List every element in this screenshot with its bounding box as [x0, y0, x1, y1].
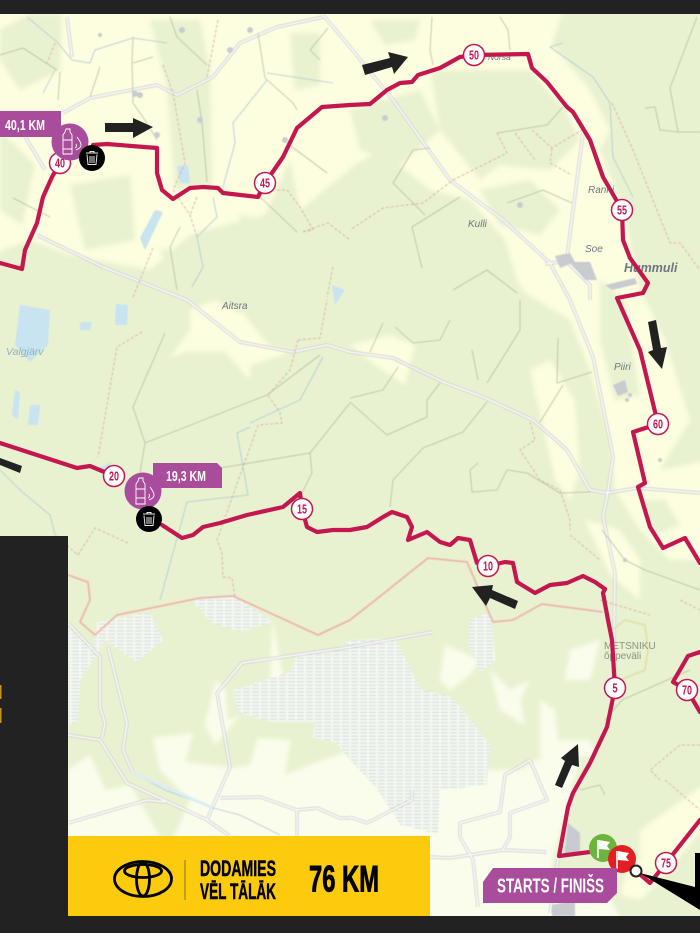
- km marker 60: [648, 414, 668, 434]
- sponsor banner: [68, 836, 430, 916]
- slogan: VĒL TĀLĀK: [200, 879, 276, 904]
- protected area boundary: [68, 558, 603, 635]
- km marker 5: [604, 678, 626, 698]
- slogan: DODAMIES: [200, 856, 276, 881]
- whitish clearings in the south: [68, 620, 600, 926]
- km marker 40: [50, 152, 70, 174]
- training ground boundary: [612, 620, 648, 680]
- km marker 20: [104, 466, 124, 486]
- forest blotches inside farmland: [0, 14, 680, 535]
- place: Aitsra: Aitsra: [221, 301, 248, 312]
- direction arrow: [105, 118, 153, 138]
- aid station 40,1 km: [0, 111, 105, 171]
- km marker 10: [478, 556, 498, 576]
- label: starts / finiss: STARTS / FINIŠS: [497, 874, 604, 898]
- divider: [184, 860, 186, 900]
- km marker 70: [676, 680, 698, 700]
- place: Ranni: Ranni: [588, 185, 615, 196]
- km marker 55: 55: [617, 202, 627, 218]
- direction arrow: [555, 744, 579, 788]
- km marker 75: 75: [661, 856, 671, 870]
- km marker 20: 20: [109, 468, 119, 484]
- place: Nõrsa: Norsa: [488, 52, 511, 62]
- km marker 50: [464, 44, 484, 66]
- water bodies: [12, 165, 345, 478]
- place: õppeväli: õppeväli: [604, 651, 641, 662]
- km marker 5: 5: [612, 680, 618, 696]
- label: starts / finiss: [483, 868, 617, 903]
- distance: 76 km: 76 KM: [309, 858, 379, 900]
- km marker 15: [292, 498, 312, 520]
- km marker 70: 70: [682, 682, 692, 698]
- left dark panel: [0, 536, 68, 933]
- streams: [0, 17, 633, 835]
- km marker 55: [612, 200, 632, 220]
- km marker 40: 40: [55, 156, 65, 170]
- distance label 40,1 km: 40,1 KM: [5, 117, 45, 134]
- icon: red finish flag: [608, 845, 636, 873]
- bottom bar: [0, 916, 700, 933]
- icon: water bottle: [52, 124, 88, 160]
- start and finish marker: [483, 834, 700, 910]
- km marker 50: 50: [469, 48, 479, 62]
- icon: trash bin: [136, 506, 162, 532]
- direction arrow: [648, 320, 667, 369]
- wetland hatching: [68, 597, 496, 834]
- distance label 19,3 km: 19,3 KM: [166, 468, 206, 485]
- callout pointer: [630, 853, 700, 910]
- place names: [6, 52, 678, 662]
- settlements: [98, 27, 662, 916]
- km marker 15: 15: [297, 502, 307, 516]
- top bar: [0, 0, 700, 14]
- km marker 10: 10: [483, 558, 493, 574]
- km marker 45: 45: [260, 176, 270, 190]
- icon: green start flag: [589, 834, 617, 862]
- direction arrow: [472, 585, 518, 609]
- direction arrow: [0, 458, 22, 473]
- direction arrow: [362, 52, 408, 75]
- icon: water bottle: [124, 472, 162, 510]
- place: Soe: Soe: [585, 244, 603, 255]
- place: Hummuli: Hummuli: [624, 261, 678, 275]
- km marker 60: 60: [653, 416, 663, 432]
- icon: trash bin: [79, 145, 105, 171]
- place: Valgjärv: Valgjärv: [6, 346, 44, 358]
- aid station 19,3 km: [124, 463, 222, 532]
- km marker 75: [656, 852, 676, 874]
- place: Piiri: Piiri: [614, 362, 631, 373]
- slogan: [200, 856, 276, 904]
- place: Kulli: Kulli: [468, 219, 488, 230]
- km marker 45: [254, 172, 276, 194]
- place: Metsniku: METSNIKU: [604, 641, 656, 652]
- dashed tracks: [47, 20, 700, 810]
- icon: toyota logo: [114, 862, 172, 896]
